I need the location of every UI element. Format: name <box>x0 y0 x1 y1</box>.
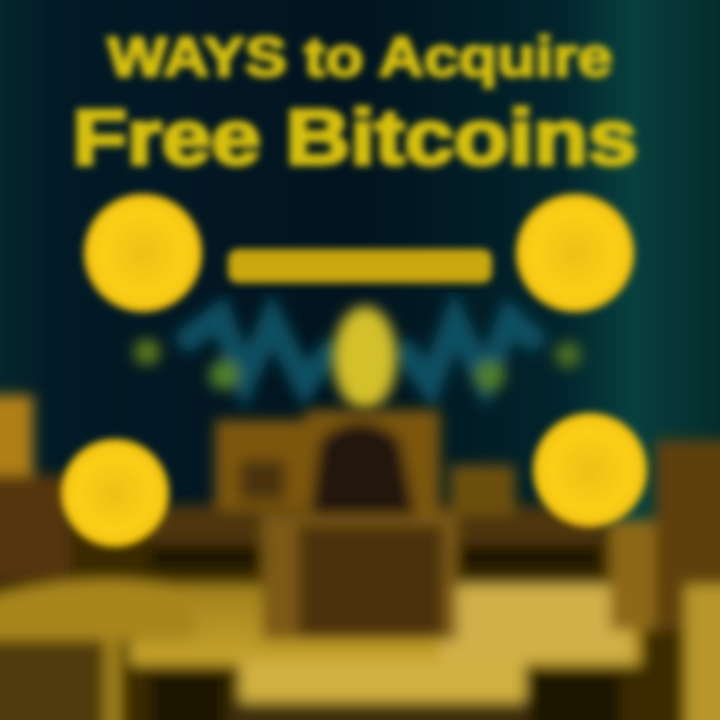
left edge block <box>0 395 33 475</box>
bottom left shadow <box>150 672 225 720</box>
back shelf shadow <box>150 545 600 569</box>
network diagram <box>134 315 581 391</box>
back left block inset <box>240 460 285 500</box>
back shelf <box>150 505 600 550</box>
node left inner <box>209 360 239 390</box>
left table <box>0 580 195 720</box>
icon: central figure <box>333 306 397 410</box>
icon: coin top right <box>516 194 634 312</box>
bottom strip <box>230 705 530 720</box>
icon: coin top left <box>84 194 202 312</box>
teal zigzag left <box>180 315 335 385</box>
icon: coin lower right <box>533 413 647 527</box>
banner bar <box>228 249 492 283</box>
left lower shadow <box>0 640 105 720</box>
right tower light <box>610 520 655 630</box>
node left outer <box>134 339 160 365</box>
right lower block <box>685 585 720 720</box>
right tower <box>655 440 720 630</box>
left brown stack <box>0 475 70 580</box>
monitor dark <box>310 422 415 515</box>
back centre block <box>305 410 440 520</box>
back right block <box>450 465 515 515</box>
laptop <box>262 515 457 640</box>
bottom right shadow <box>525 672 620 720</box>
desk scene <box>0 395 720 720</box>
floor <box>130 585 640 665</box>
title <box>72 25 638 181</box>
floor highlight <box>440 585 630 660</box>
title line: ways to acquire: WAYS to Acquire <box>108 25 612 88</box>
node right outer <box>555 342 581 368</box>
node right inner <box>475 361 505 391</box>
scene base <box>0 525 720 720</box>
laptop screen <box>298 525 443 637</box>
icon: coin lower left <box>61 439 169 547</box>
bottom band <box>240 660 525 702</box>
back left block <box>215 420 310 510</box>
title line: free bitcoins: Free Bitcoins <box>72 93 638 181</box>
teal zigzag right <box>400 318 540 385</box>
